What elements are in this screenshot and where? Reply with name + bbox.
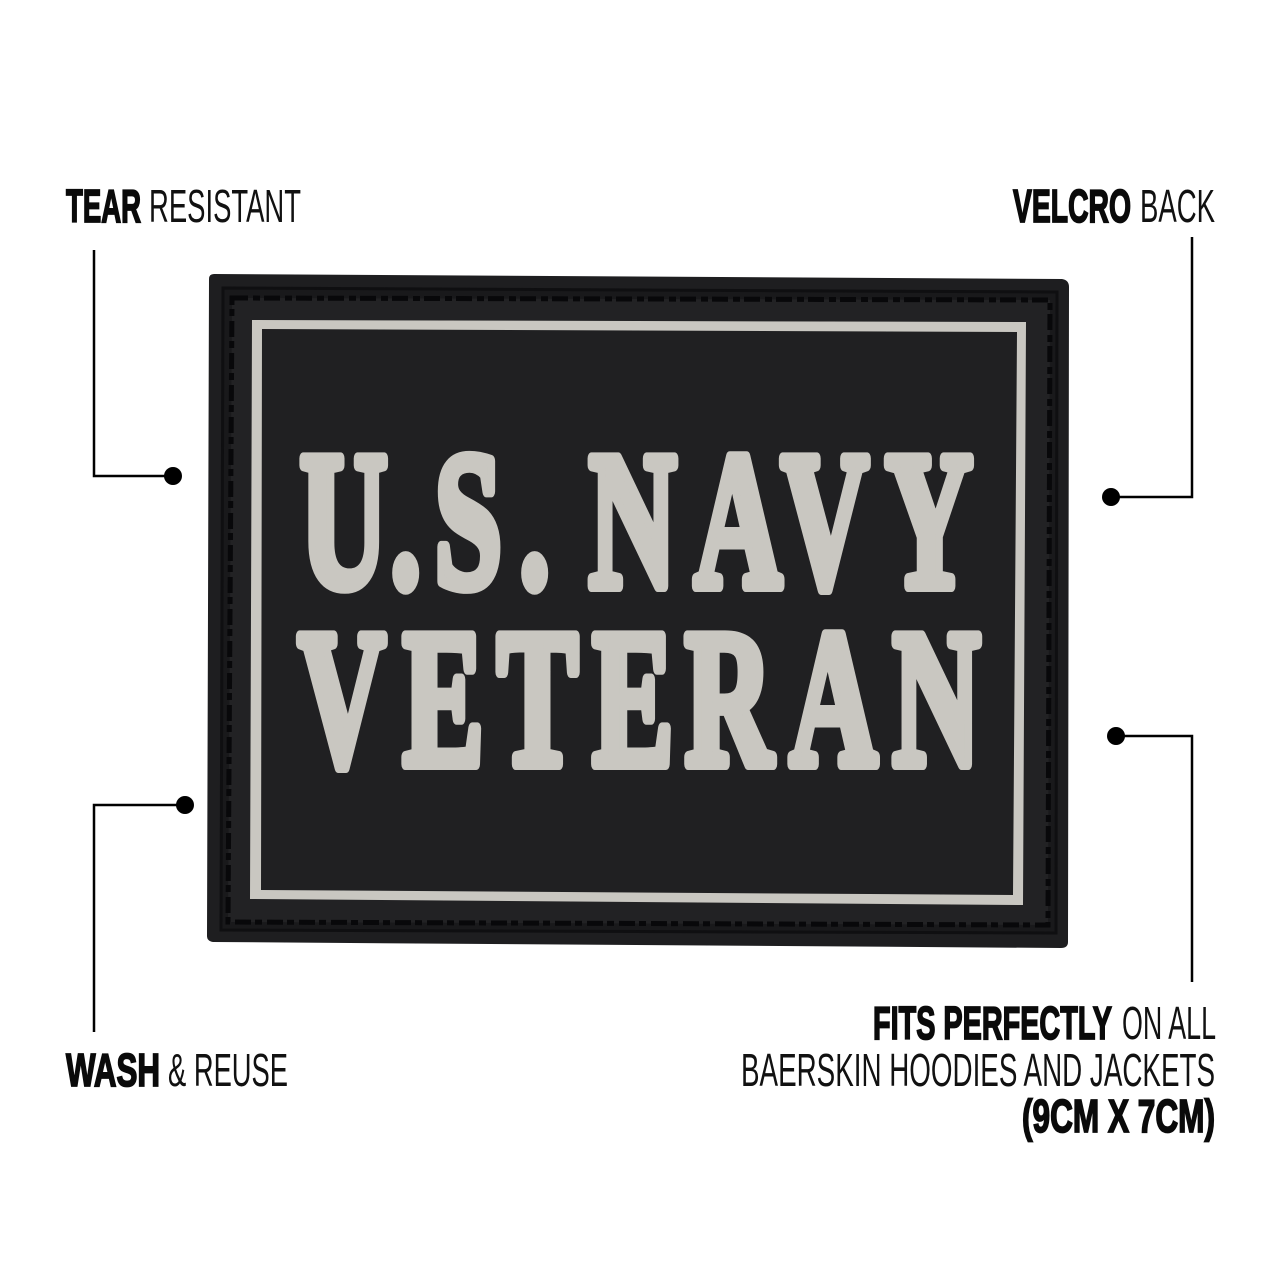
label: ON ALL <box>1122 997 1216 1049</box>
label: WASH <box>66 1044 160 1096</box>
dot <box>176 796 194 814</box>
dot <box>1102 488 1120 506</box>
label: VELCRO <box>1013 180 1131 232</box>
label: FITS PERFECTLY <box>873 997 1112 1049</box>
callout: fits perfectly <box>741 727 1216 1142</box>
label: TEAR <box>66 180 141 232</box>
label: BACK <box>1140 180 1215 232</box>
label <box>741 997 1216 1142</box>
leader line <box>94 250 173 476</box>
leader line <box>94 805 185 1032</box>
label <box>66 180 301 232</box>
light border frame <box>250 320 1026 905</box>
patch body <box>207 274 1069 948</box>
patch text line 1: U.S. NAVY <box>300 413 973 629</box>
dot <box>1107 727 1125 745</box>
stitched groove <box>221 288 1057 933</box>
patch text line 2: VETERAN <box>298 591 980 807</box>
leader line <box>1116 736 1192 982</box>
patch: U.S. Navy Veteran <box>207 274 1069 948</box>
callout: tear resistant <box>66 180 301 485</box>
callout: velcro back <box>1013 180 1215 506</box>
label: RESISTANT <box>149 180 301 232</box>
label: & REUSE <box>168 1044 288 1096</box>
dot <box>164 467 182 485</box>
inner panel <box>250 320 1026 905</box>
leader line <box>1111 237 1192 497</box>
callout: wash and reuse <box>66 796 288 1096</box>
stitching <box>228 298 1050 925</box>
label <box>66 1044 288 1096</box>
